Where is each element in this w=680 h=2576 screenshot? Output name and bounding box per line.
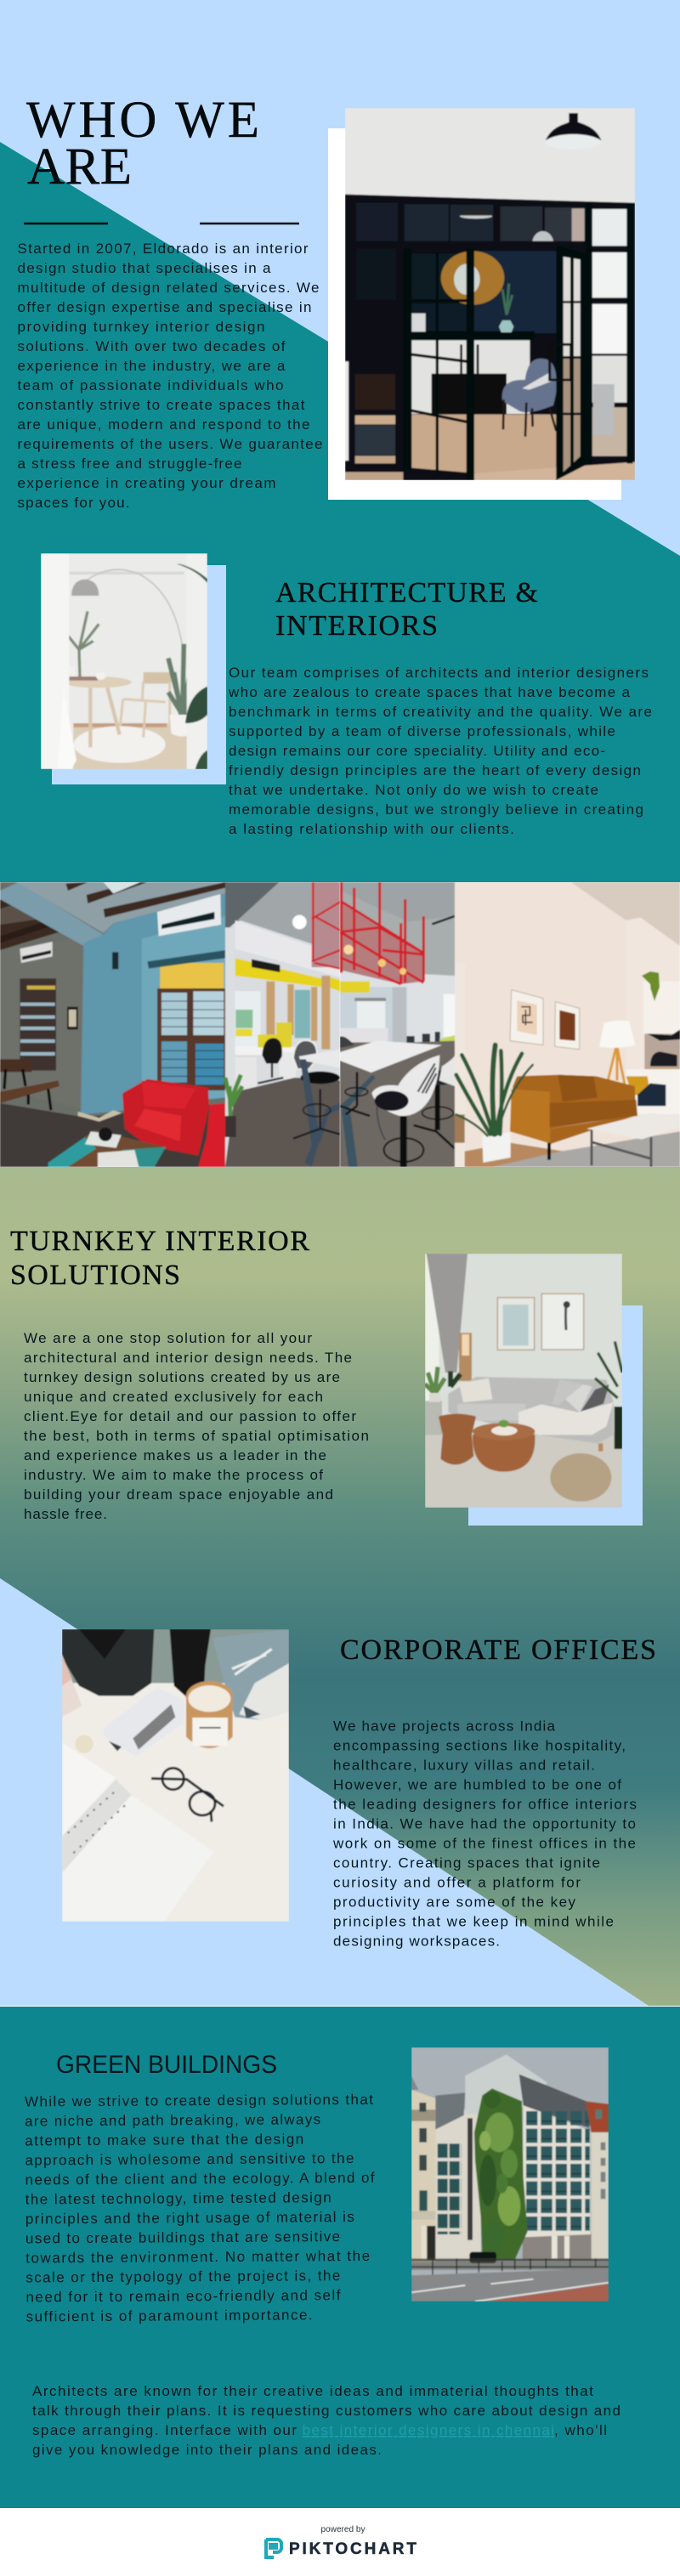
text block: corporate description bbox=[332, 1718, 637, 1950]
divider lines bbox=[24, 223, 299, 224]
heading: who we are: ARE bbox=[27, 139, 132, 195]
panel: architecture and interiors bbox=[41, 553, 652, 837]
text block: who we are intro: providing turnkey interior design bbox=[17, 319, 265, 335]
text block: who we are intro: multitude of design related services. We bbox=[17, 280, 320, 296]
link: best interior designers in chennai: best interior designers in chennai bbox=[303, 2422, 554, 2438]
panel: who we are bbox=[0, 0, 680, 882]
photo: grey sofa living room bbox=[425, 1254, 622, 1508]
text block: corporate description: curiosity and offer a platform for bbox=[333, 1875, 581, 1890]
text block: closing paragraph with link: Architects are known for their creative ideas and immaterial thoughts that bbox=[32, 2383, 593, 2399]
text block: closing paragraph with link: give you knowledge into their plans and ideas. bbox=[32, 2442, 382, 2458]
heading: turnkey interior solutions: TURNKEY INTERIOR bbox=[10, 1226, 309, 1257]
text block: turnkey description: and experience makes us a leader in the bbox=[24, 1447, 326, 1464]
heading: architecture and interiors: ARCHITECTURE & bbox=[275, 577, 538, 609]
text block: corporate description: We have projects across India bbox=[333, 1718, 556, 1734]
text block: turnkey description: architectural and interior design needs. The bbox=[24, 1350, 352, 1366]
text block: architecture and interiors: design remains our core speciality. Utility and eco- bbox=[229, 743, 605, 759]
text block: architecture and interiors: supported by a team of diverse professionals, while bbox=[229, 723, 615, 739]
text block: corporate description: in India. We have had the opportunity to bbox=[333, 1815, 636, 1832]
wordmark: piktochart: PIKTOCHART bbox=[289, 2540, 416, 2558]
text block: who we are intro: spaces for you. bbox=[17, 495, 129, 511]
text block: who we are intro: team of passionate individuals who bbox=[17, 377, 284, 393]
background: teal bbox=[0, 2007, 680, 2508]
text block: closing paragraph with link: talk through their plans. It is requesting customers who care about design and bbox=[32, 2403, 620, 2419]
text block: corporate description: principles that we keep in mind while bbox=[333, 1914, 614, 1929]
photo: white room with arc lamp bbox=[41, 553, 207, 769]
text block: green buildings description: approach is wholesome and sensitive to the bbox=[25, 2150, 354, 2168]
text block: green buildings description: While we strive to create design solutions that bbox=[25, 2092, 373, 2109]
footer: powered by piktochart bbox=[0, 2508, 680, 2576]
text block: turnkey description bbox=[24, 1330, 369, 1522]
text block: turnkey description: turnkey design solutions created by us are bbox=[24, 1369, 340, 1385]
text block: who we are intro: offer design expertise and specialise in bbox=[17, 299, 311, 315]
heading: who we are: WHO WE bbox=[26, 92, 259, 149]
text block: who we are intro: experience in creating your dream bbox=[17, 475, 275, 491]
panel: green buildings bbox=[0, 2007, 680, 2508]
text block: green buildings description: attempt to make sure that the design bbox=[25, 2131, 303, 2149]
text block: who we are intro: experience in the industry, we are a bbox=[17, 358, 286, 374]
panel: turnkey and corporate background bbox=[0, 1167, 680, 2006]
text block: architecture and interiors bbox=[228, 665, 652, 837]
photo: building with vertical garden bbox=[411, 2047, 609, 2301]
background: green teal gradient bbox=[0, 1167, 680, 2006]
panel: corporate offices bbox=[62, 1629, 656, 1950]
text block: turnkey description: client.Eye for detail and our passion to offer bbox=[24, 1408, 356, 1424]
text block: green buildings description: principles and the right usage of material is bbox=[26, 2209, 354, 2227]
text block: who we are intro: solutions. With over two decades of bbox=[17, 338, 286, 354]
text block: corporate description: healthcare, luxury villas and retail. bbox=[333, 1758, 595, 1773]
text block: turnkey description: the best, both in terms of spatial optimisation bbox=[24, 1428, 369, 1444]
text block: green buildings description: sufficient is of paramount importance. bbox=[26, 2307, 313, 2324]
image frame: light blue offset bbox=[468, 1305, 643, 1526]
text block: architecture and interiors: Our team comprises of architects and interior designers bbox=[229, 665, 649, 681]
background: light blue diagonal bbox=[0, 1578, 649, 2006]
image frame: light blue offset bbox=[52, 565, 226, 784]
text block: turnkey description: building your dream space enjoyable and bbox=[24, 1486, 333, 1503]
text block: green buildings description: the latest technology, time tested design bbox=[26, 2189, 332, 2207]
photo: blue lounge and office left part bbox=[0, 882, 340, 1167]
text block: architecture and interiors: friendly design principles are the heart of every design bbox=[229, 762, 641, 778]
text block: who we are intro bbox=[17, 241, 322, 511]
text block: green buildings description bbox=[25, 2092, 376, 2324]
text block: closing paragraph with link: space arranging. Interface with our bbox=[32, 2422, 297, 2438]
icon: piktochart logo bbox=[266, 2539, 281, 2557]
text block: architecture and interiors: who are zealous to create spaces that have become a bbox=[228, 684, 631, 700]
text block: who we are intro: constantly strive to create spaces that bbox=[17, 397, 305, 413]
text block: corporate description: the leading designers for office interiors bbox=[333, 1797, 637, 1812]
photo: desk with candle and glasses bbox=[62, 1629, 289, 1922]
text block: turnkey description: We are a one stop solution for all your bbox=[24, 1330, 312, 1346]
text block: green buildings description: are niche and path breaking, we always bbox=[25, 2111, 320, 2129]
text block: corporate description: encompassing sections like hospitality, bbox=[333, 1737, 626, 1754]
text block: closing paragraph with link bbox=[32, 2383, 620, 2458]
text block: green buildings description: used to create buildings that are sensitive bbox=[26, 2228, 340, 2246]
heading: architecture and interiors: INTERIORS bbox=[275, 610, 438, 642]
text block: architecture and interiors: that we undertake. Not only do we wish to create bbox=[229, 782, 598, 798]
heading: architecture and interiors bbox=[275, 577, 538, 642]
text block: who we are intro: requirements of the users. We guarantee bbox=[17, 436, 322, 452]
text block: corporate description: designing workspaces. bbox=[333, 1933, 500, 1950]
heading: who we are bbox=[26, 92, 259, 195]
powered by label: powered by bbox=[321, 2525, 366, 2534]
panel: photo strip of three interiors bbox=[0, 882, 680, 1167]
text block: closing paragraph with link: , who'll bbox=[554, 2422, 607, 2438]
text block: corporate description: country. Creating spaces that ignite bbox=[333, 1854, 600, 1871]
text block: green buildings description: need for it to remain eco-friendly and self bbox=[26, 2287, 341, 2305]
photo: black glass partition room bbox=[345, 108, 635, 480]
heading: turnkey interior solutions: SOLUTIONS bbox=[10, 1260, 180, 1291]
text block: turnkey description: industry. We aim to make the process of bbox=[24, 1467, 323, 1483]
text block: green buildings description: towards the environment. No matter what the bbox=[26, 2248, 370, 2266]
text block: who we are intro: are unique, modern and respond to the bbox=[17, 416, 309, 433]
image frame: white offset bbox=[328, 128, 621, 500]
text block: who we are intro: design studio that specialises in a bbox=[17, 260, 271, 276]
text block: who we are intro: a stress free and struggle-free bbox=[17, 456, 241, 472]
text block: corporate description: However, we are humbled to be one of bbox=[333, 1776, 621, 1793]
background: light blue with teal diagonal bbox=[0, 0, 680, 882]
text block: who we are intro: Started in 2007, Eldorado is an interior bbox=[17, 241, 309, 257]
panel: turnkey interior solutions bbox=[10, 1226, 643, 1526]
text block: architecture and interiors: memorable designs, but we strongly believe in creating bbox=[229, 801, 643, 818]
text block: green buildings description: scale or the typology of the project is, the bbox=[26, 2267, 340, 2285]
heading: turnkey interior solutions bbox=[10, 1226, 309, 1291]
text block: turnkey description: unique and created exclusively for each bbox=[24, 1389, 323, 1405]
text block: architecture and interiors: benchmark in terms of creativity and the quality. We are bbox=[229, 704, 652, 720]
text block: corporate description: work on some of the finest offices in the bbox=[332, 1836, 636, 1851]
text block: turnkey description: hassle free. bbox=[24, 1506, 107, 1522]
heading: green buildings: GREEN BUILDINGS bbox=[56, 2051, 277, 2079]
photo: office and lounge right part bbox=[340, 882, 680, 1167]
heading: corporate offices: CORPORATE OFFICES bbox=[340, 1634, 656, 1666]
text block: green buildings description: needs of the client and the ecology. A blend of bbox=[26, 2170, 375, 2188]
text block: architecture and interiors: a lasting relationship with our clients. bbox=[229, 821, 514, 837]
text block: corporate description: productivity are some of the key bbox=[333, 1894, 576, 1911]
